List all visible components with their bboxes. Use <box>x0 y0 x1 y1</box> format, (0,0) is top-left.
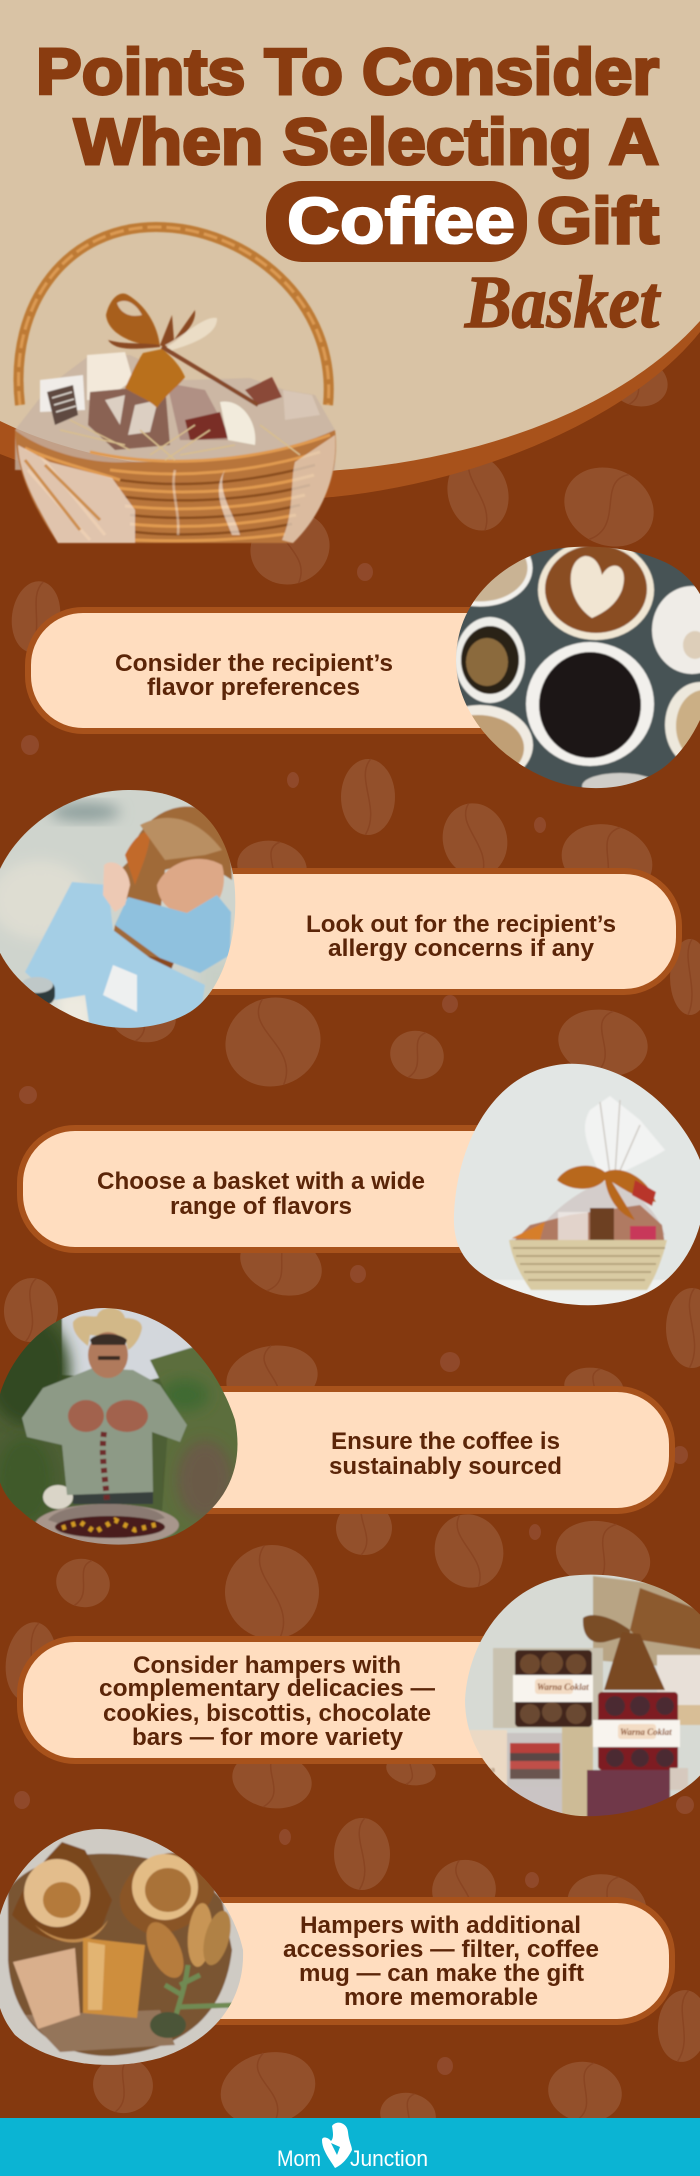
towel <box>43 1485 73 1509</box>
photo: coffee farmer <box>0 1300 245 1550</box>
raised hand <box>103 862 130 912</box>
pill text: accessories — filter, coffee <box>283 1936 599 1963</box>
pill background <box>100 871 679 992</box>
tumbler left <box>13 1948 80 2029</box>
pill text: range of flavors <box>170 1193 352 1220</box>
pill text: bars — for more variety <box>132 1724 404 1751</box>
pill text: sustainably sourced <box>329 1453 562 1480</box>
pill text: Hampers with additional <box>300 1912 581 1939</box>
panel: flavor preferences <box>28 532 700 799</box>
footer bar <box>0 2118 700 2176</box>
pill text: cookies, biscottis, chocolate <box>103 1700 431 1727</box>
panel: complementary delicacies <box>20 1570 700 1820</box>
pill background <box>100 1900 672 2022</box>
pill text: Ensure the coffee is <box>331 1428 560 1455</box>
photo: wicker gift basket <box>15 227 336 543</box>
panel: additional accessories <box>0 1825 672 2075</box>
backing box <box>493 1648 603 1728</box>
logo text mom: Mom <box>277 2146 321 2171</box>
jacket <box>25 882 205 1030</box>
panel: allergy concerns <box>0 785 679 1035</box>
pill background <box>20 1639 580 1761</box>
hands <box>68 1400 104 1432</box>
pill text: mug — can make the gift <box>299 1960 584 1987</box>
side card <box>470 1730 507 1786</box>
gift box <box>593 1576 700 1670</box>
pill text: Consider hampers with <box>133 1652 401 1679</box>
wooden spoons <box>139 1916 191 1984</box>
logo icon: mother and child heart <box>322 2123 352 2168</box>
red cupcake box <box>507 1733 563 1787</box>
bow <box>557 1166 656 1220</box>
face <box>157 859 224 915</box>
panel: sustainably sourced <box>0 1300 672 1550</box>
dried straw <box>60 420 300 460</box>
hair <box>113 806 233 959</box>
cellophane <box>585 1096 665 1178</box>
tan box <box>562 1727 593 1817</box>
harvest basket <box>35 1504 179 1546</box>
tumbler right <box>83 1938 145 2018</box>
pill text: allergy concerns if any <box>328 935 595 962</box>
cellophane highlights <box>18 445 135 543</box>
word gift: Gift <box>537 184 659 257</box>
photo: woman coughing <box>0 785 240 1035</box>
photo: chocolate hamper: Warna Coklat <box>620 1727 672 1737</box>
photo: coffee cups <box>456 546 700 788</box>
raised sleeve <box>115 895 231 973</box>
pill text: Look out for the recipient’s <box>306 911 616 938</box>
cup left <box>24 1859 90 1927</box>
shirt <box>22 1368 187 1495</box>
title line 1: Points To Consider <box>36 35 659 108</box>
trousers <box>73 1490 153 1504</box>
pill text: more memorable <box>344 1984 538 2011</box>
pill text: flavor preferences <box>147 674 360 701</box>
pill background <box>20 1128 580 1250</box>
chocolate box 1 <box>515 1650 592 1727</box>
lower box <box>587 1770 670 1818</box>
hat <box>73 1308 142 1350</box>
basket contents <box>15 352 335 470</box>
wicker bowl <box>15 430 336 543</box>
pill text: complementary delicacies — <box>99 1675 435 1702</box>
wicker basket <box>509 1240 667 1290</box>
falling coffee cherries <box>103 1432 107 1510</box>
title <box>36 35 661 344</box>
logo text junction: Junction <box>350 2146 428 2171</box>
ribbon bow <box>106 294 258 408</box>
pill text: Choose a basket with a wide <box>97 1168 425 1195</box>
face <box>88 1332 128 1378</box>
pill background <box>100 1389 672 1511</box>
cup right <box>132 1854 198 1920</box>
title line 2: When Selecting A <box>74 105 659 178</box>
photo: gift basket on grey <box>450 1060 700 1310</box>
pill background <box>28 610 580 731</box>
photo: chocolate hamper: Warna Coklat <box>537 1682 589 1692</box>
wooden saucers <box>12 1842 112 1942</box>
script word basket: Basket <box>464 262 661 344</box>
header curved banner <box>0 0 700 500</box>
photo: wooden cups hamper <box>0 1825 250 2075</box>
highlighted word: Coffee <box>287 184 515 257</box>
highlight pill <box>266 181 527 262</box>
chocolate box 2 <box>598 1692 678 1770</box>
panel: wide range of flavors <box>20 1060 700 1310</box>
green sprig <box>165 1965 235 2030</box>
basket handle <box>19 227 329 405</box>
ribbon bow <box>583 1615 630 1643</box>
photo: chocolate hamper <box>460 1570 700 1820</box>
coffee cup <box>34 984 56 1004</box>
pill text: Consider the recipient’s <box>115 650 393 677</box>
goods <box>514 1204 665 1241</box>
white shirt <box>103 965 137 1012</box>
photo: chocolate hamper: Minna <box>476 1767 495 1774</box>
